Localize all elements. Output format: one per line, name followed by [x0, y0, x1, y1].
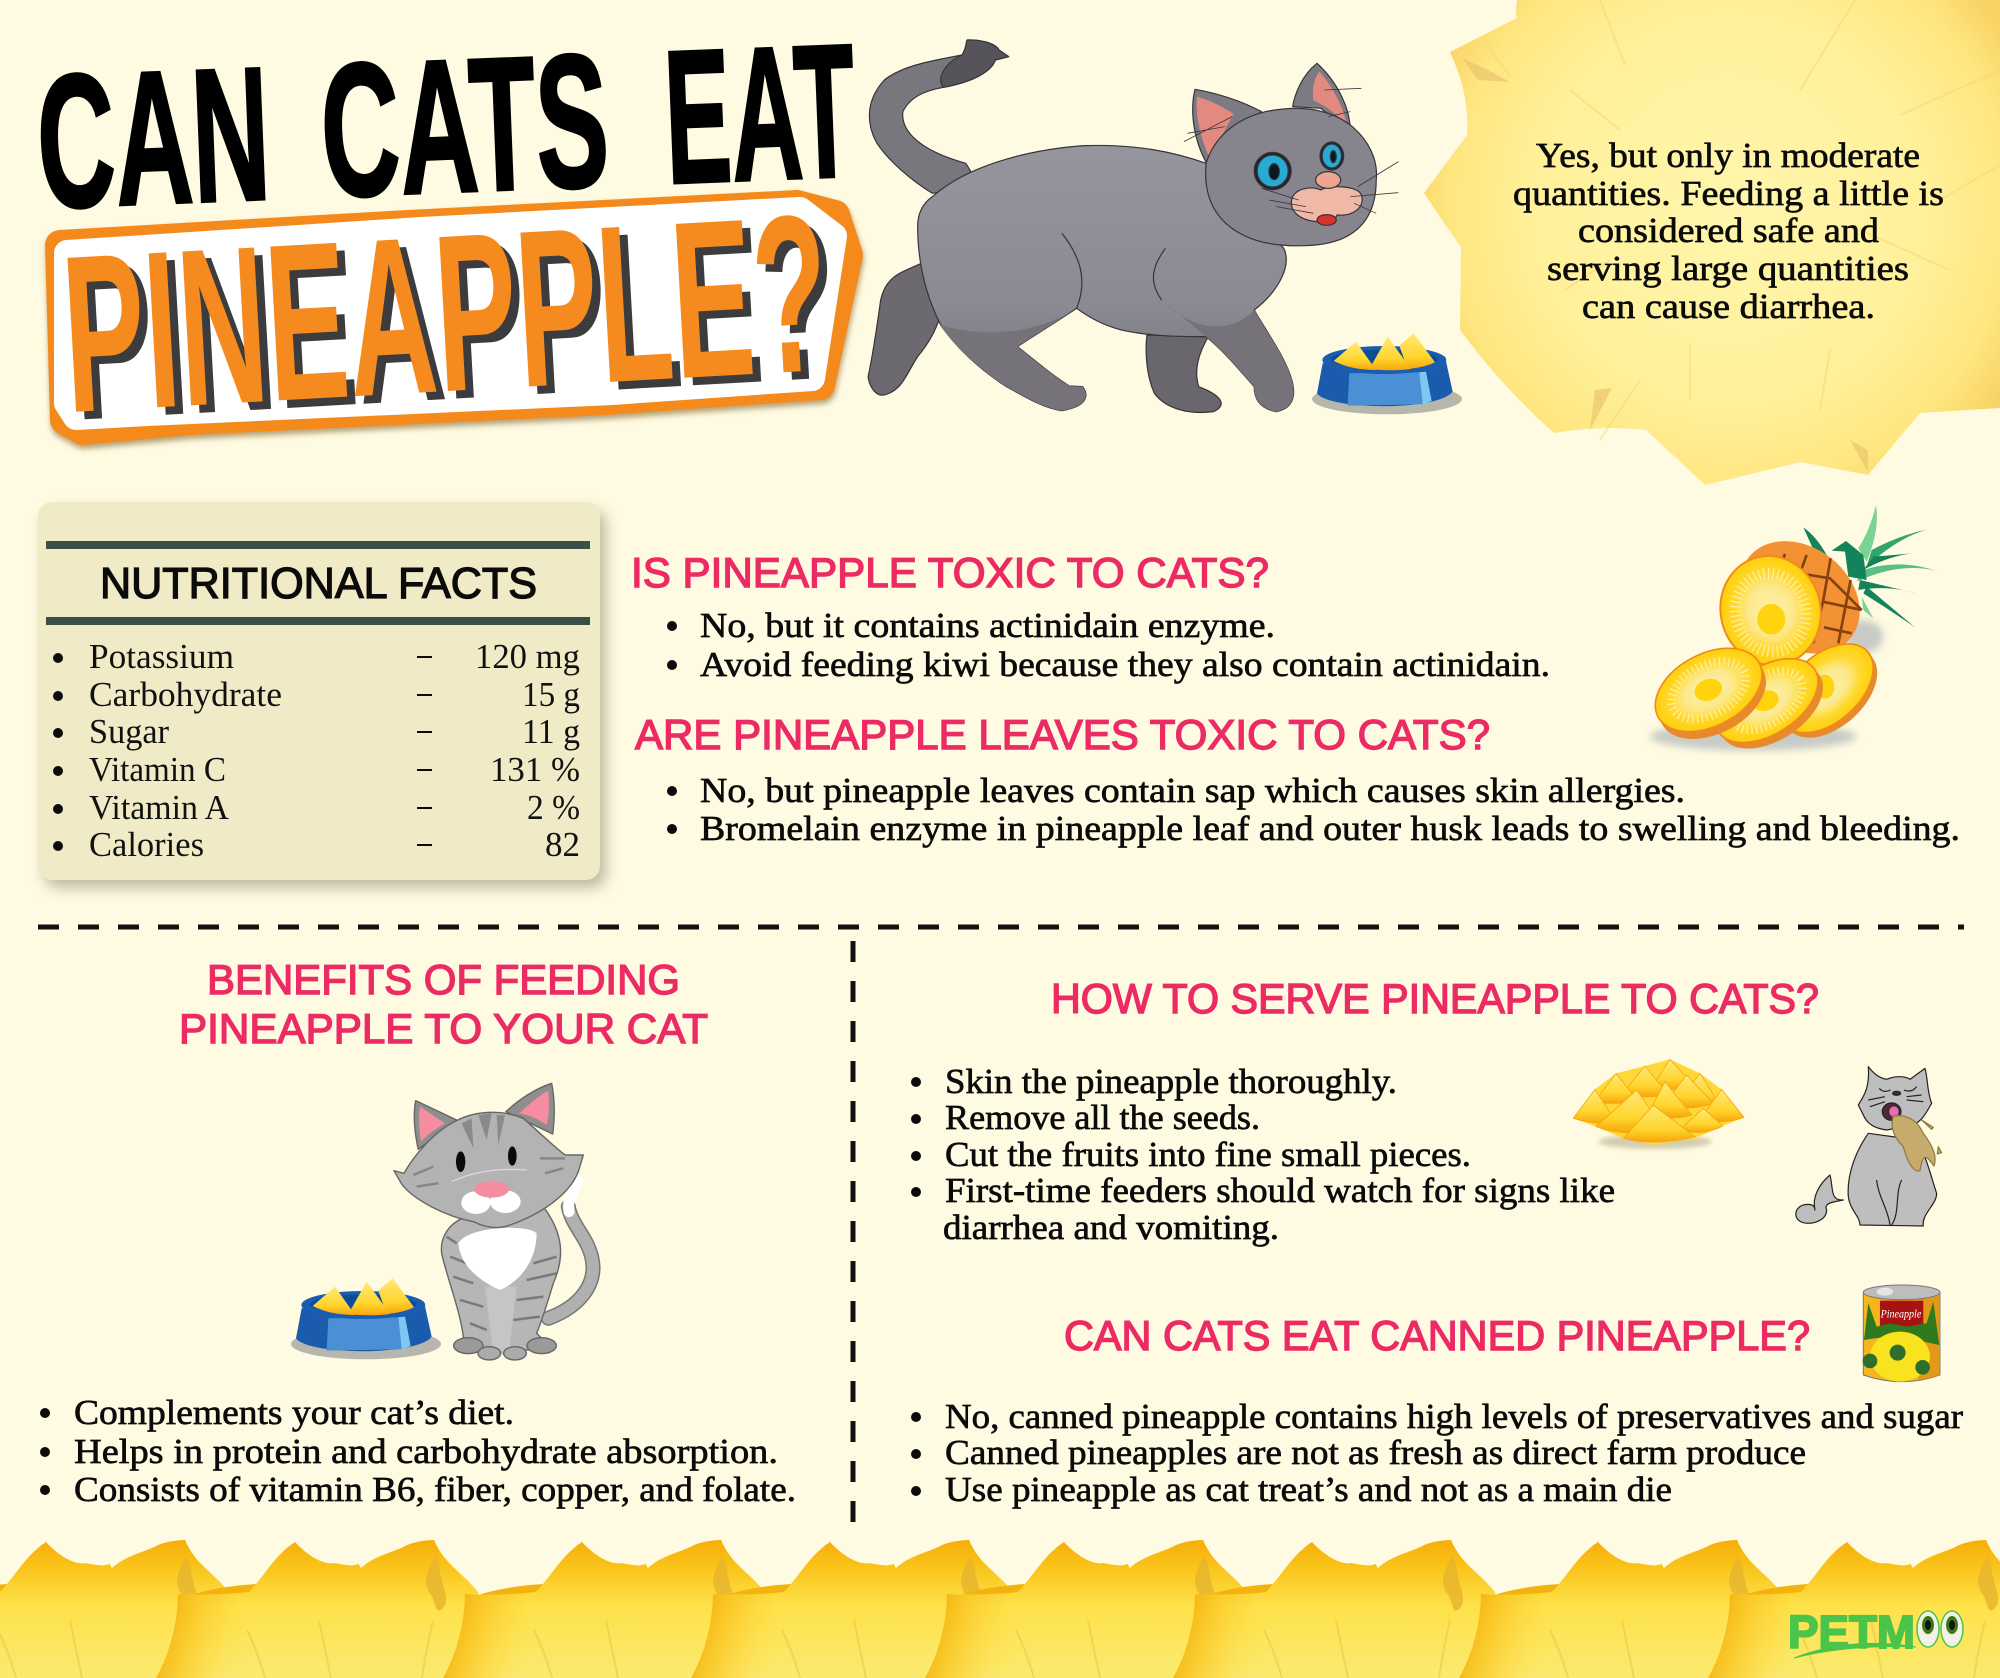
title: pineapple sticker: PINEAPPLE? [57, 168, 834, 460]
divider: horizontal dashed line [38, 924, 1964, 930]
illustration: vomiting cat [1796, 1067, 1942, 1226]
heading: are pineapple leaves toxic: ARE PINEAPPLE LEAVES TOXIC TO CATS? [635, 711, 1490, 758]
answer text: can cause diarrhea. [1582, 288, 1875, 326]
list: toxic answers: No, but it contains actinidain enzyme. [700, 607, 1275, 645]
nutrition rows: Potassium [89, 637, 234, 676]
left slice [1641, 631, 1780, 756]
cat body [1848, 1133, 1937, 1226]
answer text: considered safe and [1578, 212, 1879, 250]
list: benefits: Complements your cat’s diet. [74, 1394, 514, 1432]
nutrition rows: 120 mg [475, 637, 580, 676]
nutrition rows: 131 % [490, 750, 580, 789]
answer text: quantities. Feeding a little is [1513, 175, 1944, 213]
can label: Pineapple [1880, 1308, 1921, 1320]
icon: blue bowl with pineapple [1312, 333, 1462, 414]
vomit [1892, 1116, 1942, 1171]
muzzle [1184, 88, 1398, 225]
ears [414, 1083, 554, 1149]
list: toxic answers [667, 607, 1550, 684]
title: pineapple sticker [57, 167, 848, 468]
footer: pineapple band [0, 1540, 2000, 1678]
illustration: pineapple chunks [1573, 1059, 1744, 1149]
illustration: sitting tabby cat with bowl [291, 1083, 593, 1360]
nutrition rows: Carbohydrate [89, 675, 282, 714]
heading: benefits: PINEAPPLE TO YOUR CAT [179, 1005, 708, 1052]
heading: canned pineapple: CAN CATS EAT CANNED PINEAPPLE? [1064, 1312, 1810, 1359]
title: can cats eat: CATS [317, 15, 612, 238]
icon: pineapple can [1863, 1285, 1940, 1382]
list: how to serve [911, 1063, 1615, 1247]
title: can cats eat: EAT [661, 5, 859, 224]
face details [413, 1113, 565, 1214]
nutritional facts heading: NUTRITIONAL FACTS [100, 559, 537, 608]
illustration: pineapple and slices [1641, 505, 1937, 766]
nutrition rows: 11 g [522, 712, 580, 751]
logo: petmoo: PETM [1788, 1606, 1915, 1658]
cat face [1868, 1087, 1923, 1120]
nutrition rows: Sugar [89, 712, 169, 751]
leaves [1803, 505, 1937, 627]
nutrition rows: Calories [89, 825, 204, 864]
panel: nutritional facts [38, 502, 606, 888]
title: can cats eat [33, 5, 859, 249]
heading: benefits [179, 956, 708, 1052]
nutrition rows: 82 [545, 825, 580, 864]
list: canned answers: Use pineapple as cat treat’s and not as a main die [945, 1471, 1672, 1509]
tail [548, 1181, 593, 1318]
nutrition rows: Vitamin A [89, 788, 230, 827]
list: leaves answers: Bromelain enzyme in pineapple leaf and outer husk leads to swelling and bleeding. [700, 810, 1960, 848]
heading: how to serve: HOW TO SERVE PINEAPPLE TO CATS? [1051, 975, 1819, 1022]
cat tail [1796, 1175, 1843, 1223]
head [1206, 108, 1377, 246]
heading: is pineapple toxic: IS PINEAPPLE TOXIC TO CATS? [631, 549, 1269, 596]
nutrition rows: 15 g [522, 675, 580, 714]
answer text: Yes, but only in moderate [1536, 137, 1920, 175]
pineapple body [1718, 518, 1882, 677]
list: how to serve: Cut the fruits into fine small pieces. [945, 1136, 1471, 1174]
list: benefits: Consists of vitamin B6, fiber, copper, and folate. [74, 1471, 796, 1509]
list: canned answers: No, canned pineapple contains high levels of preservatives and sugar [945, 1398, 1964, 1436]
list: how to serve: diarrhea and vomiting. [943, 1209, 1279, 1247]
ears [1193, 89, 1262, 165]
slice shape [1424, 0, 2000, 485]
illustration: walking grey cat [868, 40, 1398, 412]
food bowl [291, 1278, 441, 1359]
far rear leg [868, 263, 940, 395]
tail [869, 40, 1009, 193]
body [441, 1207, 561, 1360]
paws [454, 1338, 483, 1354]
answer text [1513, 137, 1944, 326]
title: can cats eat: CAN [33, 28, 273, 249]
title: pineapple sticker: PINEAPPLE? [65, 175, 843, 468]
eyes [1254, 142, 1344, 190]
nutrition rows: Vitamin C [89, 750, 226, 789]
far front leg [1146, 335, 1221, 412]
list: benefits: Helps in protein and carbohydrate absorption. [74, 1433, 778, 1471]
divider: vertical dashed line [850, 941, 856, 1532]
list: how to serve: Remove all the seeds. [945, 1099, 1260, 1137]
callout: pineapple slice with answer [1424, 0, 2000, 485]
list: canned answers: Canned pineapples are not as fresh as direct farm produce [945, 1434, 1806, 1472]
list: benefits [40, 1394, 796, 1509]
nutrition rows [53, 637, 580, 864]
nutrition rows: 2 % [527, 788, 580, 827]
heading: benefits: BENEFITS OF FEEDING [207, 956, 680, 1003]
cat head [1858, 1067, 1932, 1130]
list: leaves answers: No, but pineapple leaves contain sap which causes skin allergies. [700, 772, 1685, 810]
list: canned answers [911, 1398, 1964, 1509]
list: how to serve: Skin the pineapple thoroughly. [945, 1063, 1397, 1101]
list: toxic answers: Avoid feeding kiwi because they also contain actinidain. [700, 646, 1550, 684]
head [394, 1112, 583, 1227]
list: how to serve: First-time feeders should watch for signs like [945, 1172, 1615, 1210]
answer text: serving large quantities [1547, 250, 1909, 288]
right slice [1763, 627, 1894, 755]
middle slice [1700, 641, 1838, 766]
body [918, 145, 1294, 412]
list: leaves answers [667, 772, 1960, 848]
cut face [1709, 545, 1832, 676]
